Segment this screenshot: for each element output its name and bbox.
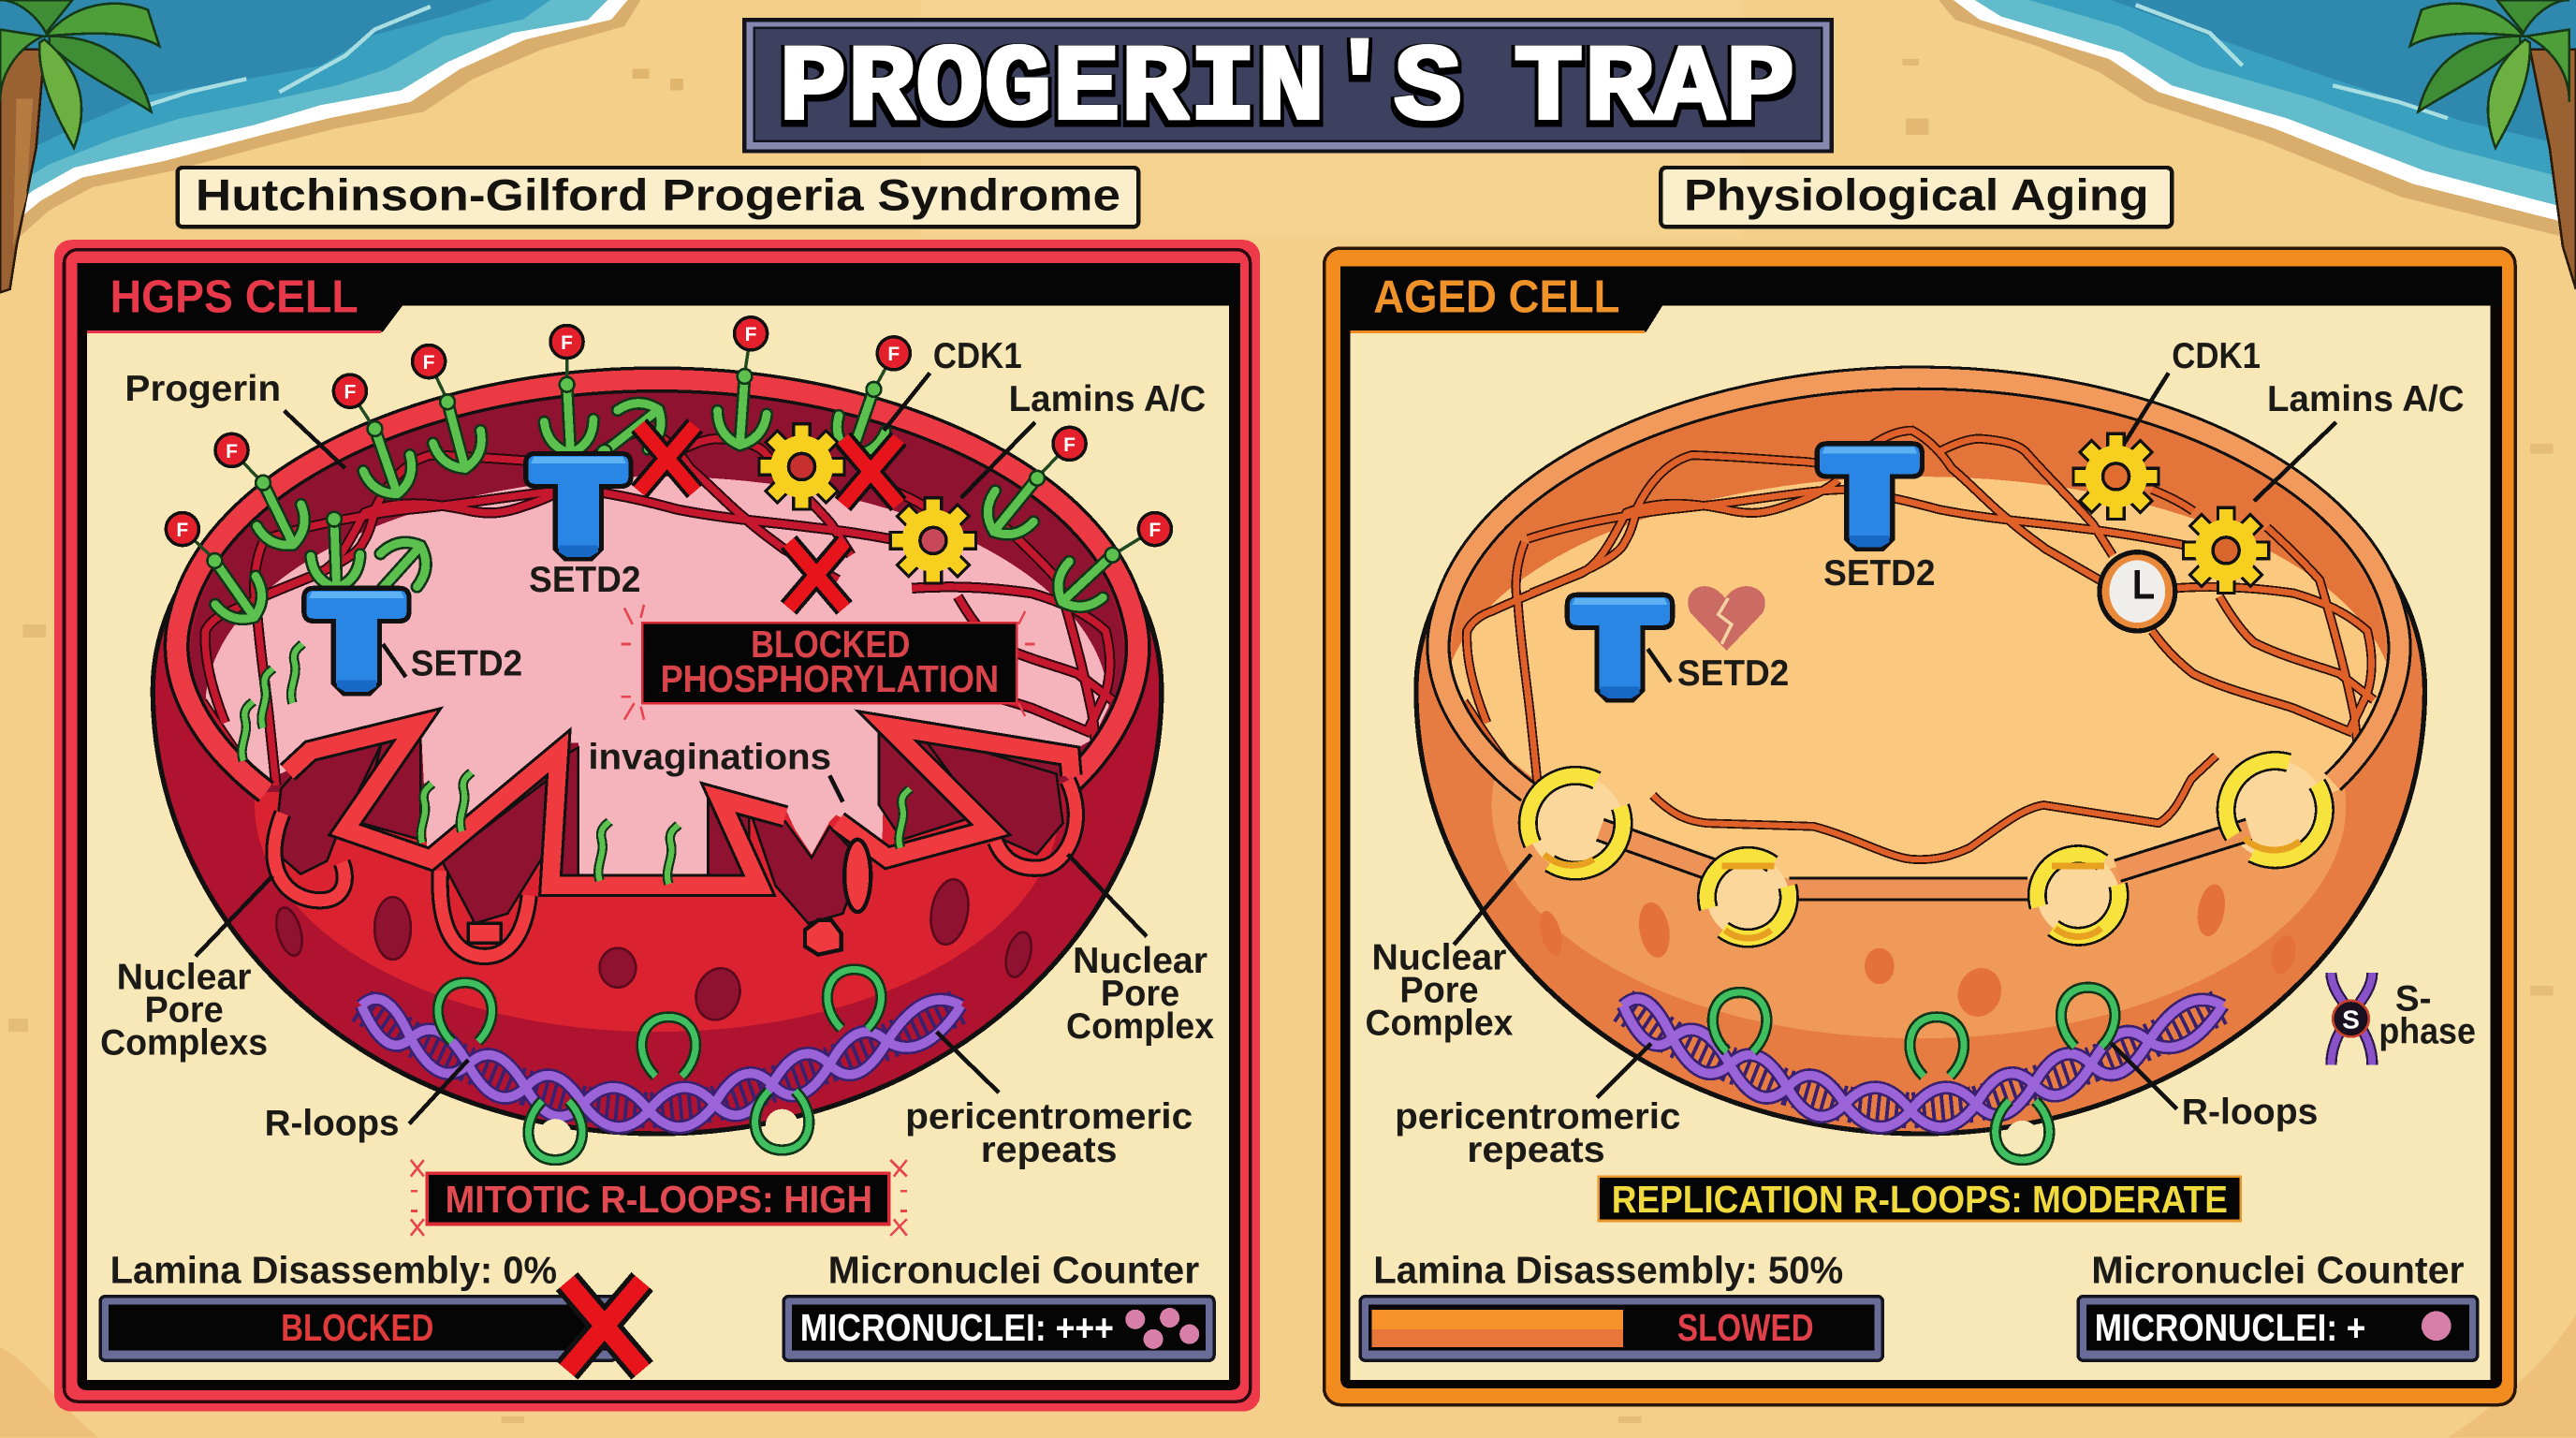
inner wall <box>1452 391 2386 792</box>
tab: HGPS CELL <box>78 263 1240 332</box>
labels: HGPS nucleus <box>100 336 1215 1170</box>
palm tree: right <box>2410 0 2576 289</box>
callout: replication R-loops: REPLICATION R-LOOPS: MODERATE <box>1612 1178 2228 1221</box>
labels: HGPS nucleus: repeats <box>981 1130 1117 1170</box>
micronuclei counter: HGPS <box>783 1249 1214 1360</box>
labels: HGPS nucleus: pericentromeric <box>905 1097 1193 1137</box>
lighter inner zone <box>1492 781 2346 1038</box>
labels: aged nucleus: phase <box>2378 1011 2476 1051</box>
membrane folds <box>287 725 1071 886</box>
callout: mitotic R-loops <box>411 1160 907 1236</box>
labels: aged nucleus: R-loops <box>2182 1092 2318 1132</box>
callout: blocked phosphorylation: BLOCKED <box>751 623 910 666</box>
subtitle: aging <box>1661 168 2172 227</box>
panel: HGPS cell <box>54 240 1260 1412</box>
bowl body <box>1416 370 2424 1134</box>
lamina disassembly meter: aged: SLOWED <box>1677 1306 1814 1349</box>
membrane band <box>1600 829 2249 888</box>
progress fill <box>1372 1310 1623 1347</box>
lamina disassembly meter: aged: Lamina Disassembly: 50% <box>1373 1249 1843 1292</box>
labels: aged nucleus: Complex <box>1365 1004 1514 1044</box>
micronuclei counter: aged <box>2078 1249 2478 1360</box>
nucleoplasm <box>205 477 1109 875</box>
farnesyl tags <box>166 317 1171 546</box>
nuclear pore openings <box>1528 761 2324 938</box>
DNA: pericentromeric repeats <box>361 999 961 1127</box>
R-loops: aged <box>1713 988 2115 1160</box>
callout: blocked phosphorylation: PHOSPHORYLATION <box>661 657 999 700</box>
nucleoplasm <box>1442 477 2395 879</box>
farnesyl tags: F <box>745 324 757 345</box>
dark invagination wedges <box>274 726 1063 923</box>
farnesyl tags: F <box>561 332 573 354</box>
labels: HGPS nucleus: Nuclear <box>117 958 252 998</box>
farnesyl tags: F <box>887 344 900 365</box>
lamin network <box>202 431 1112 788</box>
labels: HGPS nucleus: SETD2 <box>411 643 522 683</box>
lower lamin fibre <box>1653 756 2217 859</box>
lamina disassembly meter: HGPS: BLOCKED <box>281 1306 433 1349</box>
ocean: top right <box>1939 0 2576 240</box>
SETD2 proteins: aged <box>1567 444 1922 700</box>
micronuclei counter: aged: Micronuclei Counter <box>2091 1249 2465 1292</box>
progerin anchors <box>190 367 1134 631</box>
labels: HGPS nucleus: CDK1 <box>933 336 1022 376</box>
icon: micronuclei dots <box>1125 1308 1199 1349</box>
labels: aged nucleus: CDK1 <box>2172 336 2261 376</box>
tab: HGPS CELL: HGPS CELL <box>110 271 359 322</box>
lamin network <box>1464 431 2374 788</box>
small progerin fragments <box>242 644 910 884</box>
rim <box>1439 378 2399 792</box>
labels: HGPS nucleus: Complex <box>1066 1006 1215 1047</box>
nuclear pores <box>274 781 1076 956</box>
title text <box>779 28 1795 151</box>
icon: S-phase DNA <box>2331 973 2372 1064</box>
lamina disassembly meter: aged <box>1360 1249 1882 1360</box>
labels: aged nucleus: Pore <box>1399 971 1479 1011</box>
icon: broken heart <box>1688 586 1765 651</box>
DNA: pericentromeric repeats <box>1623 999 2223 1127</box>
farnesyl tags: F <box>1149 520 1161 541</box>
inner wall <box>190 391 1124 792</box>
CDK1 gears: HGPS <box>759 424 976 583</box>
blocked X marks <box>639 426 899 608</box>
labels: HGPS nucleus: Pore <box>1101 974 1179 1014</box>
labels: HGPS nucleus: Complexs <box>100 1023 268 1064</box>
nucleus: aged cross-section <box>1416 370 2424 1134</box>
R-loops: HGPS <box>438 969 881 1160</box>
labels: aged nucleus: SETD2 <box>1823 553 1935 594</box>
labels: HGPS nucleus: Nuclear <box>1073 941 1208 981</box>
labels: HGPS nucleus: Progerin <box>124 369 281 409</box>
panel: aged cell <box>1325 248 2515 1405</box>
title text: PROGERIN'S <box>779 28 1462 151</box>
icon: clock <box>2100 552 2175 631</box>
tab: AGED CELL: AGED CELL <box>1373 271 1620 322</box>
rim <box>177 379 1138 792</box>
labels: HGPS nucleus: R-loops <box>265 1104 400 1144</box>
micronuclei counter: HGPS: Micronuclei Counter <box>828 1249 1200 1292</box>
title text: TRAP <box>1513 28 1795 151</box>
farnesyl tags: F <box>176 520 188 541</box>
icon: micronucleus dot <box>2422 1312 2452 1341</box>
labels: HGPS nucleus: SETD2 <box>529 560 641 600</box>
SETD2 proteins: HGPS <box>304 453 631 694</box>
farnesyl tags: F <box>423 352 435 374</box>
tab: AGED CELL <box>1340 266 2502 332</box>
nucleus: HGPS cross-section <box>153 370 1162 1134</box>
labels: aged nucleus: S- <box>2395 978 2431 1019</box>
palm tree: left <box>0 0 159 292</box>
farnesyl tags: F <box>1063 434 1076 456</box>
labels: aged nucleus: repeats <box>1467 1130 1605 1170</box>
ocean: top left <box>0 0 641 246</box>
bright inner zone <box>255 788 1057 1032</box>
title banner <box>744 20 1832 151</box>
labels: aged nucleus <box>1365 336 2476 1170</box>
callout: mitotic R-loops: MITOTIC R-LOOPS: HIGH <box>446 1178 872 1221</box>
micronuclei counter: aged: MICRONUCLEI: + <box>2095 1306 2365 1349</box>
farnesyl tags: F <box>344 382 356 404</box>
icon: big X <box>567 1282 642 1371</box>
farnesyl tags: F <box>226 441 238 462</box>
labels: aged nucleus: Lamins A/C <box>2267 379 2465 419</box>
labels: aged nucleus: Nuclear <box>1372 937 1506 977</box>
lamina disassembly meter: HGPS: Lamina Disassembly: 0% <box>110 1249 557 1292</box>
bowl holes <box>271 876 1035 1026</box>
bowl holes <box>1535 882 2300 1023</box>
lamina disassembly meter: HGPS <box>100 1249 642 1371</box>
subtitle: aging: Physiological Aging <box>1684 171 2149 221</box>
callout: blocked phosphorylation <box>621 605 1035 720</box>
labels: HGPS nucleus: Pore <box>145 990 224 1031</box>
labels: HGPS nucleus: Lamins A/C <box>1009 379 1206 419</box>
progerin tethers <box>183 333 1155 559</box>
CDK1 gears: aged <box>2073 433 2269 594</box>
bowl body <box>153 370 1162 1134</box>
labels: aged nucleus: pericentromeric <box>1395 1097 1680 1137</box>
subtitle: HGPS: Hutchinson-Gilford Progeria Syndrome <box>196 171 1120 221</box>
labels: aged nucleus: SETD2 <box>1677 653 1789 694</box>
icon: S-phase DNA: S <box>2342 1005 2360 1034</box>
labels: HGPS nucleus: invaginations <box>588 737 831 777</box>
micronuclei counter: HGPS: MICRONUCLEI: +++ <box>800 1306 1114 1349</box>
nuclear pore rings <box>1515 747 2338 947</box>
